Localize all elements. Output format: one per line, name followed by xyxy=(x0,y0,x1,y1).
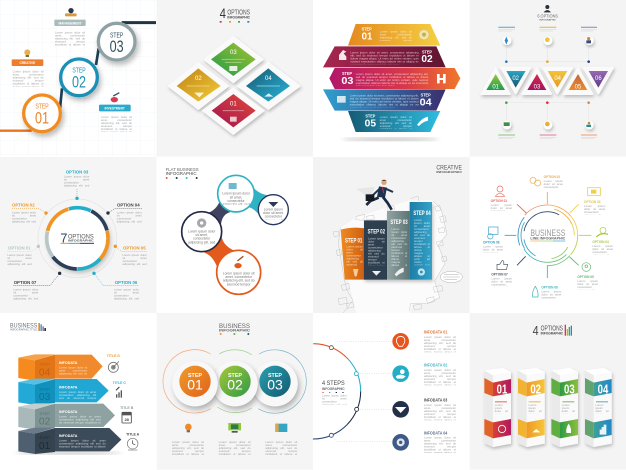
title a clock: TITLE A xyxy=(126,433,140,437)
triangle 05: 05 xyxy=(575,83,582,90)
option 01: OPTION 01 xyxy=(491,199,507,203)
icon: bulb xyxy=(185,424,192,432)
icon: screen xyxy=(228,423,241,433)
option 01: OPTION 01 xyxy=(8,245,31,250)
bottom dots xyxy=(505,101,590,104)
diamond 04 xyxy=(237,62,301,110)
icon circle 04 xyxy=(392,434,409,451)
arrow step 01: 01 xyxy=(39,441,51,452)
option 01 xyxy=(491,186,512,211)
spokes xyxy=(505,192,591,278)
arrow step 03: INFODATA xyxy=(59,386,78,390)
option 06: OPTION 06 xyxy=(541,286,558,290)
panel: hexagon five steps xyxy=(313,0,470,157)
arrow step 02: INFODATA xyxy=(59,410,78,414)
pillar 04: 04 xyxy=(598,382,608,396)
title c chart: TITLE C xyxy=(113,381,126,385)
panel: business line infographic xyxy=(470,157,626,314)
triangles title: 6 OPTIONS xyxy=(537,13,558,18)
step 02 label: STEP xyxy=(72,68,86,75)
arrow step 04: 04 xyxy=(39,367,51,378)
step 02 label xyxy=(72,68,86,91)
creative pill xyxy=(12,59,43,66)
option 05: OPTION 05 xyxy=(577,275,594,279)
option 07 xyxy=(13,272,61,301)
pillars title: 4 xyxy=(533,324,539,338)
step 04 bar: STEP 04 xyxy=(413,210,431,217)
group: third row right xyxy=(265,313,626,470)
icon circle 03 xyxy=(392,401,409,418)
title: CREATIVE xyxy=(436,165,462,172)
option 03 xyxy=(64,170,89,200)
option 03: OPTION 03 xyxy=(584,200,601,204)
center title xyxy=(322,380,345,393)
option 07: OPTION 07 xyxy=(14,280,37,285)
arrow step 04: STEP xyxy=(39,362,50,367)
bar step 04: 04 xyxy=(420,98,432,109)
triangle 01 xyxy=(481,68,510,94)
diamonds title: 4 xyxy=(220,5,226,21)
pillars title xyxy=(533,324,572,338)
option 07 xyxy=(491,260,512,287)
step 03 label xyxy=(110,32,124,56)
metaball title: FLAT BUSINESS xyxy=(166,167,199,173)
bar step 05 xyxy=(348,111,440,132)
metaball title: INFOGRAPHIC xyxy=(166,171,197,176)
bar step 04: STEP xyxy=(421,92,431,97)
triangle 04: 04 xyxy=(554,75,561,82)
step 03 badge xyxy=(259,366,291,397)
pillar 02 xyxy=(518,368,545,447)
top icons xyxy=(503,36,594,45)
step 02 bar xyxy=(364,220,387,280)
title xyxy=(436,165,463,174)
panel: three step path xyxy=(0,0,157,157)
management pill: MANAGEMENT xyxy=(59,21,82,25)
bar step 05: 05 xyxy=(365,119,376,130)
panel: creative steps with runner xyxy=(313,157,470,314)
circle: chart xyxy=(218,175,254,212)
icon circle 01 xyxy=(392,333,409,350)
option 01 xyxy=(7,245,40,266)
triangle 04 xyxy=(543,68,572,93)
circle: savings: Lorem ipsum dolor sit amet, consectetur adipiscing elit, sed do eiusmod tempor xyxy=(223,272,255,286)
option 06 xyxy=(92,272,139,301)
panel: step arrows xyxy=(0,313,157,470)
bar step 02 xyxy=(323,46,446,67)
diamonds title xyxy=(220,5,250,21)
step 03 badge: STEP xyxy=(268,373,282,379)
step 02 label: 02 xyxy=(72,72,86,91)
title a clock xyxy=(126,433,140,450)
group: second row right xyxy=(313,157,626,314)
pillars title: OPTIONS xyxy=(541,326,563,333)
investment pill: INVESTMENT xyxy=(104,106,125,110)
icon: map xyxy=(275,424,287,432)
white disc 2 xyxy=(212,361,258,406)
pillar 03 xyxy=(551,368,578,447)
title b calendar xyxy=(120,406,134,423)
group: first row right xyxy=(313,0,626,157)
circles title: INFOGRAPHIC xyxy=(219,329,250,333)
arrow step 02 xyxy=(18,403,115,430)
option 04 xyxy=(106,203,142,223)
option 05 xyxy=(577,263,598,290)
step 01 bar: STEP 01 xyxy=(345,237,363,244)
bar step 05: STEP xyxy=(365,114,375,119)
option 07: OPTION 07 xyxy=(491,272,508,276)
pillar 04 xyxy=(585,368,612,447)
arc xyxy=(265,344,361,439)
title c chart xyxy=(113,381,126,398)
icon: top person xyxy=(544,5,551,12)
arrows title xyxy=(10,322,46,331)
title d target xyxy=(107,354,120,372)
bar step 03 xyxy=(329,68,460,89)
group: second row left xyxy=(0,157,313,314)
circles title: BUSINESS xyxy=(219,323,251,330)
panel: three step circles xyxy=(157,313,313,470)
option 05: OPTION 05 xyxy=(123,245,146,250)
step 01 badge: STEP xyxy=(188,373,202,379)
center title: 4 STEPS xyxy=(322,380,345,387)
title: INFOGRAPHIC xyxy=(436,170,463,174)
bar step 01: 01 xyxy=(362,32,373,43)
triangle 03: 03 xyxy=(534,83,541,90)
option 04 xyxy=(592,227,613,255)
step 03 badge: 03 xyxy=(267,376,283,392)
top labels xyxy=(498,27,597,31)
step 03 label: 03 xyxy=(110,37,124,56)
metaball title xyxy=(166,167,199,179)
circle: handshake xyxy=(258,195,288,225)
white disc 3 xyxy=(252,361,298,406)
step 01 label: 01 xyxy=(35,108,49,127)
option 05 xyxy=(114,245,147,266)
group: first row left xyxy=(0,0,313,157)
bar step 01 xyxy=(348,24,440,46)
pillar 01 xyxy=(484,368,511,447)
sketch bricks xyxy=(333,196,447,313)
step 03 circle xyxy=(98,23,135,60)
ring title: OPTIONS xyxy=(68,234,94,241)
step 02 circle xyxy=(61,59,97,96)
white disc 1 xyxy=(172,361,218,406)
panel: four option pillars xyxy=(470,313,626,470)
triangle 06 xyxy=(584,68,613,93)
circles title xyxy=(219,323,251,335)
step 02 badge: STEP xyxy=(228,373,242,379)
bar step 03: 03 xyxy=(341,76,354,87)
ring title xyxy=(60,231,95,245)
investment pill xyxy=(99,105,131,111)
arrow step 03 xyxy=(18,379,109,405)
diamond 04: 04 xyxy=(265,75,272,82)
step 03 label: STEP xyxy=(110,32,124,39)
option 03 xyxy=(584,188,605,215)
title dots xyxy=(220,21,249,23)
option 06: OPTION 06 xyxy=(115,280,138,285)
step 04 bar xyxy=(410,202,432,280)
pillar 03: 03 xyxy=(564,382,575,396)
diamond 03: 03 xyxy=(230,49,237,56)
icon: creative bulb xyxy=(24,49,30,57)
bar step 02: 02 xyxy=(421,54,433,65)
option 02 xyxy=(12,203,48,223)
bottom labels xyxy=(498,134,597,139)
arrows title: BUSINESS xyxy=(10,322,37,329)
triangle 01: 01 xyxy=(492,83,499,90)
option 02 xyxy=(530,175,563,188)
dotted connectors xyxy=(332,341,392,441)
management pill xyxy=(54,20,86,26)
arrow step 02: 02 xyxy=(39,417,51,428)
arrow step 03: STEP xyxy=(39,386,50,391)
bar step 02: STEP xyxy=(422,49,432,54)
step 01 badge: 01 xyxy=(187,376,203,392)
option 02: OPTION 02 xyxy=(12,203,35,208)
icon circle 02 xyxy=(392,365,409,382)
orbit arcs xyxy=(163,350,306,413)
option 08 xyxy=(483,227,503,252)
triangle 03 xyxy=(522,68,551,94)
diamond 02: 02 xyxy=(195,75,202,82)
title d target: TITLE D xyxy=(107,354,120,358)
infodata 02: INFODATA 02 xyxy=(424,363,448,368)
option 04: OPTION 04 xyxy=(117,203,140,208)
triangle 06: 06 xyxy=(595,75,602,82)
title b calendar: TITLE B xyxy=(120,406,134,410)
bar step 04 xyxy=(323,89,446,111)
group: third row left xyxy=(0,313,313,470)
creative pill: CREATIVE xyxy=(19,61,35,65)
step 02 badge: 02 xyxy=(227,376,243,392)
step 01 label: STEP xyxy=(35,104,49,111)
title b calendar: 28 xyxy=(124,417,130,422)
arrow step 04 xyxy=(18,354,103,381)
step 01 bar xyxy=(341,228,365,280)
infodata 04: INFODATA 04 xyxy=(424,430,448,435)
diamond 01 xyxy=(202,87,265,135)
runner xyxy=(356,180,393,210)
triangles title: INFOGRAPHIC xyxy=(539,19,557,22)
step 03 bar: STEP 03 xyxy=(390,219,408,226)
ring title: INFOGRAPHIC xyxy=(68,239,95,243)
panel: four steps arc xyxy=(265,313,470,470)
panel: six option triangles xyxy=(470,0,626,157)
option 06 xyxy=(533,286,561,299)
panel: seven options ring xyxy=(0,157,157,314)
icon: investment pig xyxy=(111,93,119,102)
circle: savings xyxy=(217,250,261,294)
ring title: 7 xyxy=(60,231,67,245)
panel: four option diamonds xyxy=(157,0,313,157)
step 01 circle xyxy=(24,95,60,132)
step 01 badge xyxy=(179,366,211,397)
step 03 bar xyxy=(387,211,410,280)
title: BUSINESS xyxy=(530,228,565,238)
step 02 bar: STEP 02 xyxy=(368,228,385,235)
arrow step 01 xyxy=(18,428,121,454)
triangles title xyxy=(537,13,558,22)
option 04: OPTION 04 xyxy=(592,240,609,244)
option 08: OPTION 08 xyxy=(483,240,500,244)
bottom icons xyxy=(503,121,594,129)
arrow step 03: 03 xyxy=(39,392,51,403)
circle: target xyxy=(182,212,222,252)
diamond 01: 01 xyxy=(230,100,237,107)
center title: INFOGRAPHIC xyxy=(322,386,345,391)
step 02 badge xyxy=(219,366,251,397)
arrows title: INFOGRAPHIC TITLE xyxy=(10,327,38,331)
spiral rings xyxy=(517,205,578,266)
arrow step 01: INFODATA xyxy=(59,434,78,438)
triangle 02: 02 xyxy=(512,75,519,82)
speech bubble xyxy=(440,271,462,283)
bar step 01: STEP xyxy=(362,27,372,32)
pillars title: INFOGRAPHIC xyxy=(541,332,563,336)
pillar 02: 02 xyxy=(530,382,541,396)
icon: management xyxy=(65,8,77,16)
connectors xyxy=(204,184,270,279)
title xyxy=(530,228,566,241)
bar step 03: STEP xyxy=(342,71,352,76)
arrow step 02: STEP xyxy=(39,411,50,416)
diamonds title: OPTIONS xyxy=(227,10,250,17)
option 02: OPTION 02 xyxy=(544,175,560,179)
top dots xyxy=(505,60,590,63)
option 03: OPTION 03 xyxy=(66,170,89,175)
step 01 label xyxy=(35,104,49,127)
ring with segments xyxy=(47,208,108,269)
infodata 01: INFODATA 01 xyxy=(424,330,448,335)
pillar 01: 01 xyxy=(497,382,507,396)
diamonds title: INFOGRAPHIC xyxy=(227,15,250,19)
triangle 02 xyxy=(501,68,530,93)
diamond 03 xyxy=(203,36,264,83)
arrow step 01: STEP xyxy=(39,435,50,440)
diamond 02 xyxy=(167,62,229,110)
panel: flat business metaballs xyxy=(157,157,313,314)
infodata 03: INFODATA 03 xyxy=(424,398,448,403)
arrow step 04: INFODATA xyxy=(59,361,78,365)
triangle 05 xyxy=(564,68,592,94)
title: LINE INFOGRAPHIC xyxy=(530,237,566,241)
